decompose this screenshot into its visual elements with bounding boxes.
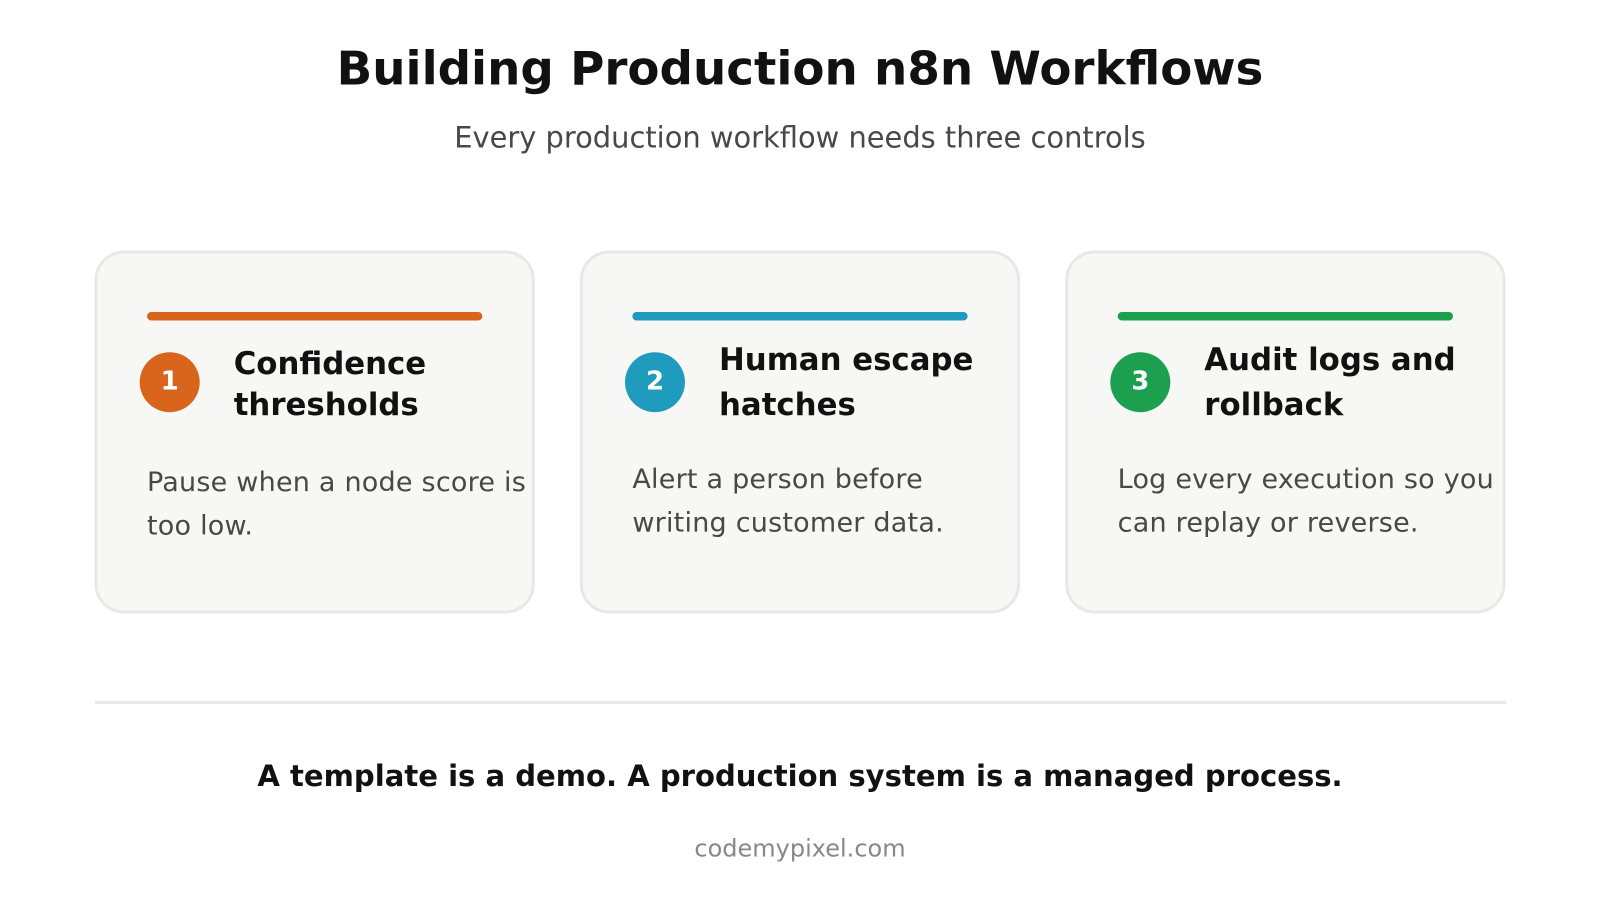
accent bar: blue xyxy=(632,312,968,320)
card body: Pause when a node score is xyxy=(147,467,526,498)
title: Building Production n8n Workflows xyxy=(337,42,1263,96)
number badge 3: 3 xyxy=(1131,366,1149,396)
card body: can replay or reverse. xyxy=(1118,508,1419,538)
number badge 2: 2 xyxy=(646,366,664,396)
card heading: thresholds xyxy=(234,387,419,423)
number badge 2 xyxy=(625,352,685,412)
card heading: hatches xyxy=(719,387,856,423)
card heading: Confidence xyxy=(234,346,426,382)
subtitle: Every production workflow needs three controls xyxy=(454,120,1146,154)
card heading: Human escape xyxy=(719,342,973,378)
accent bar: orange xyxy=(147,312,482,320)
footer: codemypixel.com xyxy=(694,834,906,862)
number badge 3 xyxy=(1110,352,1170,412)
card body: writing customer data. xyxy=(632,508,944,538)
number badge 1: 1 xyxy=(161,366,179,396)
card body: Log every execution so you xyxy=(1118,464,1494,495)
card heading: rollback xyxy=(1204,387,1345,423)
card heading: Audit logs and xyxy=(1204,342,1456,378)
panel: human escape hatches xyxy=(581,252,1019,612)
takeaway: A template is a demo. A production system is a managed process. xyxy=(257,759,1343,793)
accent bar: green xyxy=(1118,312,1453,320)
card body: Alert a person before xyxy=(632,464,923,495)
panel: audit logs and rollback xyxy=(1067,252,1504,612)
number badge 1 xyxy=(140,352,200,412)
panel: confidence thresholds xyxy=(96,252,533,612)
card body: too low. xyxy=(147,510,253,542)
